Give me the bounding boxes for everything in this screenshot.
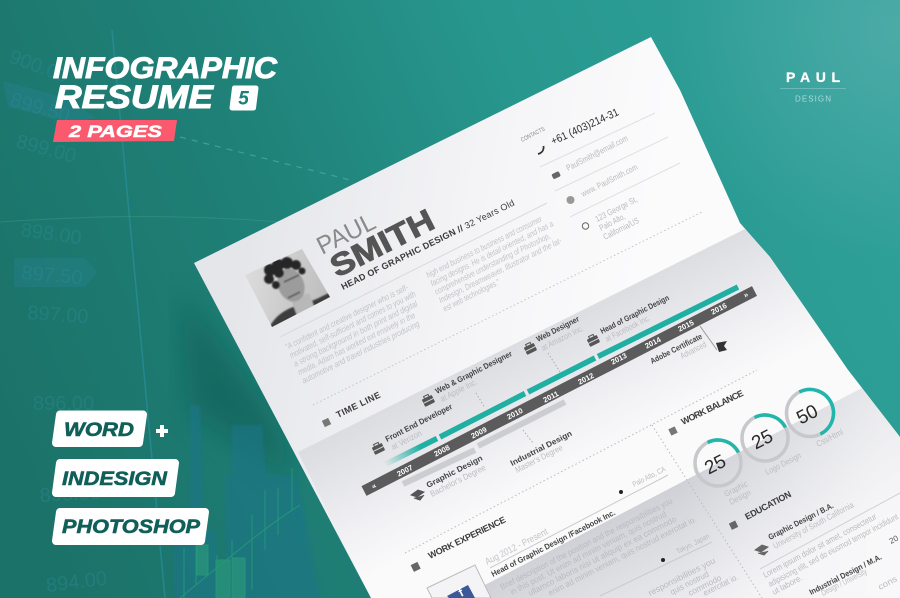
paper panel: top <box>194 37 900 598</box>
timeline years: « <box>370 481 378 491</box>
work experience entry 2: commodo <box>686 572 723 598</box>
timeline teal progress bar <box>384 287 738 465</box>
profile paragraph left: a strong background in both print and digital <box>292 298 420 369</box>
profile paragraph right: high end business to business and consumer <box>424 213 544 280</box>
work experience entry 2: quis nostrud <box>668 569 711 597</box>
brand logo: DESIGN <box>795 94 831 104</box>
brand logo <box>780 69 846 104</box>
timeline event: web designer: Web Designer <box>535 314 581 344</box>
timeline event: web and graphic designer <box>421 349 514 407</box>
button: indesign: INDESIGN <box>62 468 168 490</box>
title: INFOGRAPHIC <box>53 52 278 85</box>
contacts: +61 (403)214-31 <box>549 107 621 148</box>
timeline event: adobe certificate: Advanced <box>678 339 708 361</box>
donut chart: graphic design 25: 25 <box>701 451 730 479</box>
icon: mail <box>552 172 560 179</box>
icon: location pin <box>619 490 623 494</box>
work experience entry 1: Aug 2012 - Present <box>483 526 550 568</box>
chart dashed line <box>180 137 350 180</box>
timeline event: web and graphic designer: at Apple Inc. <box>438 377 479 404</box>
timeline education: graphic design <box>411 454 487 500</box>
chart axis numbers: 899.50 <box>8 89 72 128</box>
work experience entry 2 <box>600 531 740 598</box>
title: RESUME <box>55 79 215 115</box>
work experience entry 2: exercitat io. <box>701 572 740 598</box>
badge: 5 <box>232 88 256 110</box>
profile paragraph right: comprehensive understanding of Photoshop, <box>433 231 552 297</box>
timeline education bars <box>403 402 565 484</box>
donut chart: css html 50 <box>784 388 844 446</box>
profile paragraph left: motivated, self-sufficient and comes to you with <box>288 289 418 360</box>
name: SMITH <box>324 202 440 284</box>
contacts: California/US <box>601 215 641 242</box>
name: PAUL <box>312 208 380 260</box>
paper panel: middle <box>298 229 862 598</box>
timeline event: adobe certificate: Adobe Certificate <box>649 332 704 366</box>
button: indesign <box>56 463 175 493</box>
work experience entry 2: Tokyo, Japan <box>675 531 711 556</box>
contacts: PaulSmith@email.com <box>564 133 629 173</box>
paper panel: bottom <box>460 388 900 598</box>
work balance heading <box>668 388 745 436</box>
timeline event: head of graphic design <box>586 293 671 347</box>
donut chart: logo design 25: 25 <box>748 426 777 454</box>
button: photoshop: PHOTOSHOP <box>62 516 201 538</box>
icon: plus <box>156 425 168 437</box>
timeline education: industrial design: Industrial Design <box>509 429 574 468</box>
timeline chart <box>364 287 754 491</box>
donut chart: logo design 25 <box>740 413 802 475</box>
donut chart: css html 50: 50 <box>793 401 822 429</box>
donut chart: graphic design 25: Graphic <box>722 478 750 499</box>
timeline years: 2014 <box>643 335 663 351</box>
timeline event: head of graphic design: at Facebook Inc. <box>603 313 652 344</box>
timeline years: 2015 <box>676 318 695 334</box>
education entry 1: Lorem ipsum dolor sit amet, consectetur <box>761 511 878 580</box>
work experience entry 1: enim ad minim veniam, quis nostrud exercitat io. <box>546 514 698 598</box>
education entry 1: Graphic Design / B.A. <box>767 501 835 542</box>
facebook logo box <box>427 565 491 598</box>
profile paragraph left <box>285 284 420 384</box>
timeline year band <box>364 291 754 491</box>
button: word <box>56 414 143 443</box>
work experience entry 1: Palo Alto, CA <box>631 464 667 489</box>
chart axis numbers: 900.00 <box>6 46 71 88</box>
time line heading <box>322 390 382 427</box>
chart axis numbers: 897.00 <box>27 302 89 328</box>
profile paragraph right: Indesign, Dreamweaver, Illustrator and the lat- <box>437 235 563 305</box>
education entry 1: 20 <box>888 533 900 546</box>
timeline years: 2009 <box>469 425 488 441</box>
profile paragraph right: est web technologies." <box>441 277 502 313</box>
resume paper <box>194 37 900 598</box>
timeline years: 2016 <box>709 301 728 317</box>
profile paragraph right <box>426 216 562 312</box>
chart axis numbers: 895.00 <box>39 482 101 507</box>
education entry 1: University of South California <box>771 500 856 551</box>
education entry 2: Design / University <box>819 566 869 598</box>
chart axis numbers: 898.00 <box>19 219 83 249</box>
chart axis numbers: 896.00 <box>33 393 94 415</box>
timeline years: 2011 <box>542 389 560 404</box>
title <box>53 52 278 115</box>
profile paragraph left: automotive and travel industries producing <box>300 318 421 385</box>
badge: 2 pages: 2 PAGES <box>68 122 163 141</box>
donut chart: logo design 25: Logo Design <box>763 450 803 477</box>
work experience entry 1: Head of Graphic Design /Facebook Inc. <box>490 508 617 579</box>
timeline years: 2010 <box>505 406 524 422</box>
work experience heading: WORK EXPERIENCE <box>426 515 507 561</box>
paper shadow <box>180 290 295 480</box>
work experience entry 1: in this post. Ut enim ad minim veniam, quis nostrud <box>508 509 668 597</box>
contacts: www. PaulSmith.com <box>579 162 639 199</box>
timeline event: web and graphic designer: Web & Graphic Designer <box>434 349 514 396</box>
chart trend curve <box>0 217 280 222</box>
timeline event: front end developer: Front End Developer <box>384 402 454 444</box>
chart axis numbers: 897.50 <box>21 262 83 289</box>
icon: home <box>582 223 589 229</box>
education entry 1: ut labore. <box>770 572 804 597</box>
donut chart: css html 50: Css/Html <box>814 427 845 449</box>
chart axis numbers <box>3 46 108 597</box>
contacts <box>520 107 680 242</box>
contacts: Palo Alto, <box>597 211 627 233</box>
profile paragraph left: "A confident and creative designer who is self- <box>283 282 410 352</box>
chart axis line <box>112 30 165 598</box>
timeline education: graphic design: Graphic Design <box>425 454 484 490</box>
icon: globe <box>566 196 574 204</box>
education entry 2: cons <box>876 574 899 592</box>
timeline years: » <box>742 290 750 300</box>
chart axis numbers: 894.00 <box>45 568 108 597</box>
chart blue bars <box>172 405 320 598</box>
icon: phone <box>538 146 544 154</box>
education heading <box>729 489 793 530</box>
button: word: WORD <box>64 419 134 441</box>
timeline event: head of graphic design: Head of Graphic Design <box>599 293 671 336</box>
timeline years: 2013 <box>609 351 628 367</box>
timeline event: web designer <box>523 314 585 355</box>
profile paragraph right: facing designs. He is detail oriented, and has a <box>429 218 555 288</box>
button: photoshop <box>56 512 205 541</box>
timeline education: graphic design: Bachelor's Degree <box>428 462 487 499</box>
chart axis numbers: 899.00 <box>14 131 78 168</box>
donut chart: graphic design 25 <box>693 438 751 505</box>
portrait photo <box>245 249 330 327</box>
timeline years: 2007 <box>395 463 414 479</box>
education entry 2: Industrial Design / M.A. <box>808 552 883 597</box>
work experience entry 1: Brief description of the position and the responsibilities you <box>498 496 674 592</box>
badge: 5: 5 <box>238 88 249 110</box>
work experience heading <box>411 515 507 572</box>
profile paragraph left: media. Adam has worked ext ensively in the <box>296 310 417 377</box>
education heading: EDUCATION <box>743 489 793 522</box>
donut chart: graphic design 25: Design <box>727 487 753 507</box>
background stock chart <box>0 30 350 598</box>
job title: HEAD OF GRAPHIC DESIGN // 32 Years Old <box>339 198 516 292</box>
timeline education: industrial design: Master's Degree <box>513 442 564 475</box>
work experience entry 2: responsibilities you <box>646 555 717 598</box>
contacts: CONTACTS <box>520 127 546 144</box>
badge: 2 pages <box>53 120 177 142</box>
timeline event: front end developer: at Verizon <box>389 428 424 452</box>
timeline event: web designer: at Amazon Inc. <box>539 323 585 353</box>
timeline event: front end developer <box>371 402 454 455</box>
work experience entry 1: ullamco laboris nisi ut aliquip ex ea commodo <box>526 514 678 598</box>
timeline years: 2008 <box>432 443 451 459</box>
time line heading: TIME LINE <box>334 390 382 420</box>
timeline years <box>370 290 750 491</box>
chart green candles <box>180 468 300 598</box>
contacts: 123 George St, <box>593 194 639 224</box>
timeline years: 2012 <box>576 371 595 387</box>
brand logo: PAUL <box>786 69 840 85</box>
work balance heading: WORK BALANCE <box>679 388 745 427</box>
